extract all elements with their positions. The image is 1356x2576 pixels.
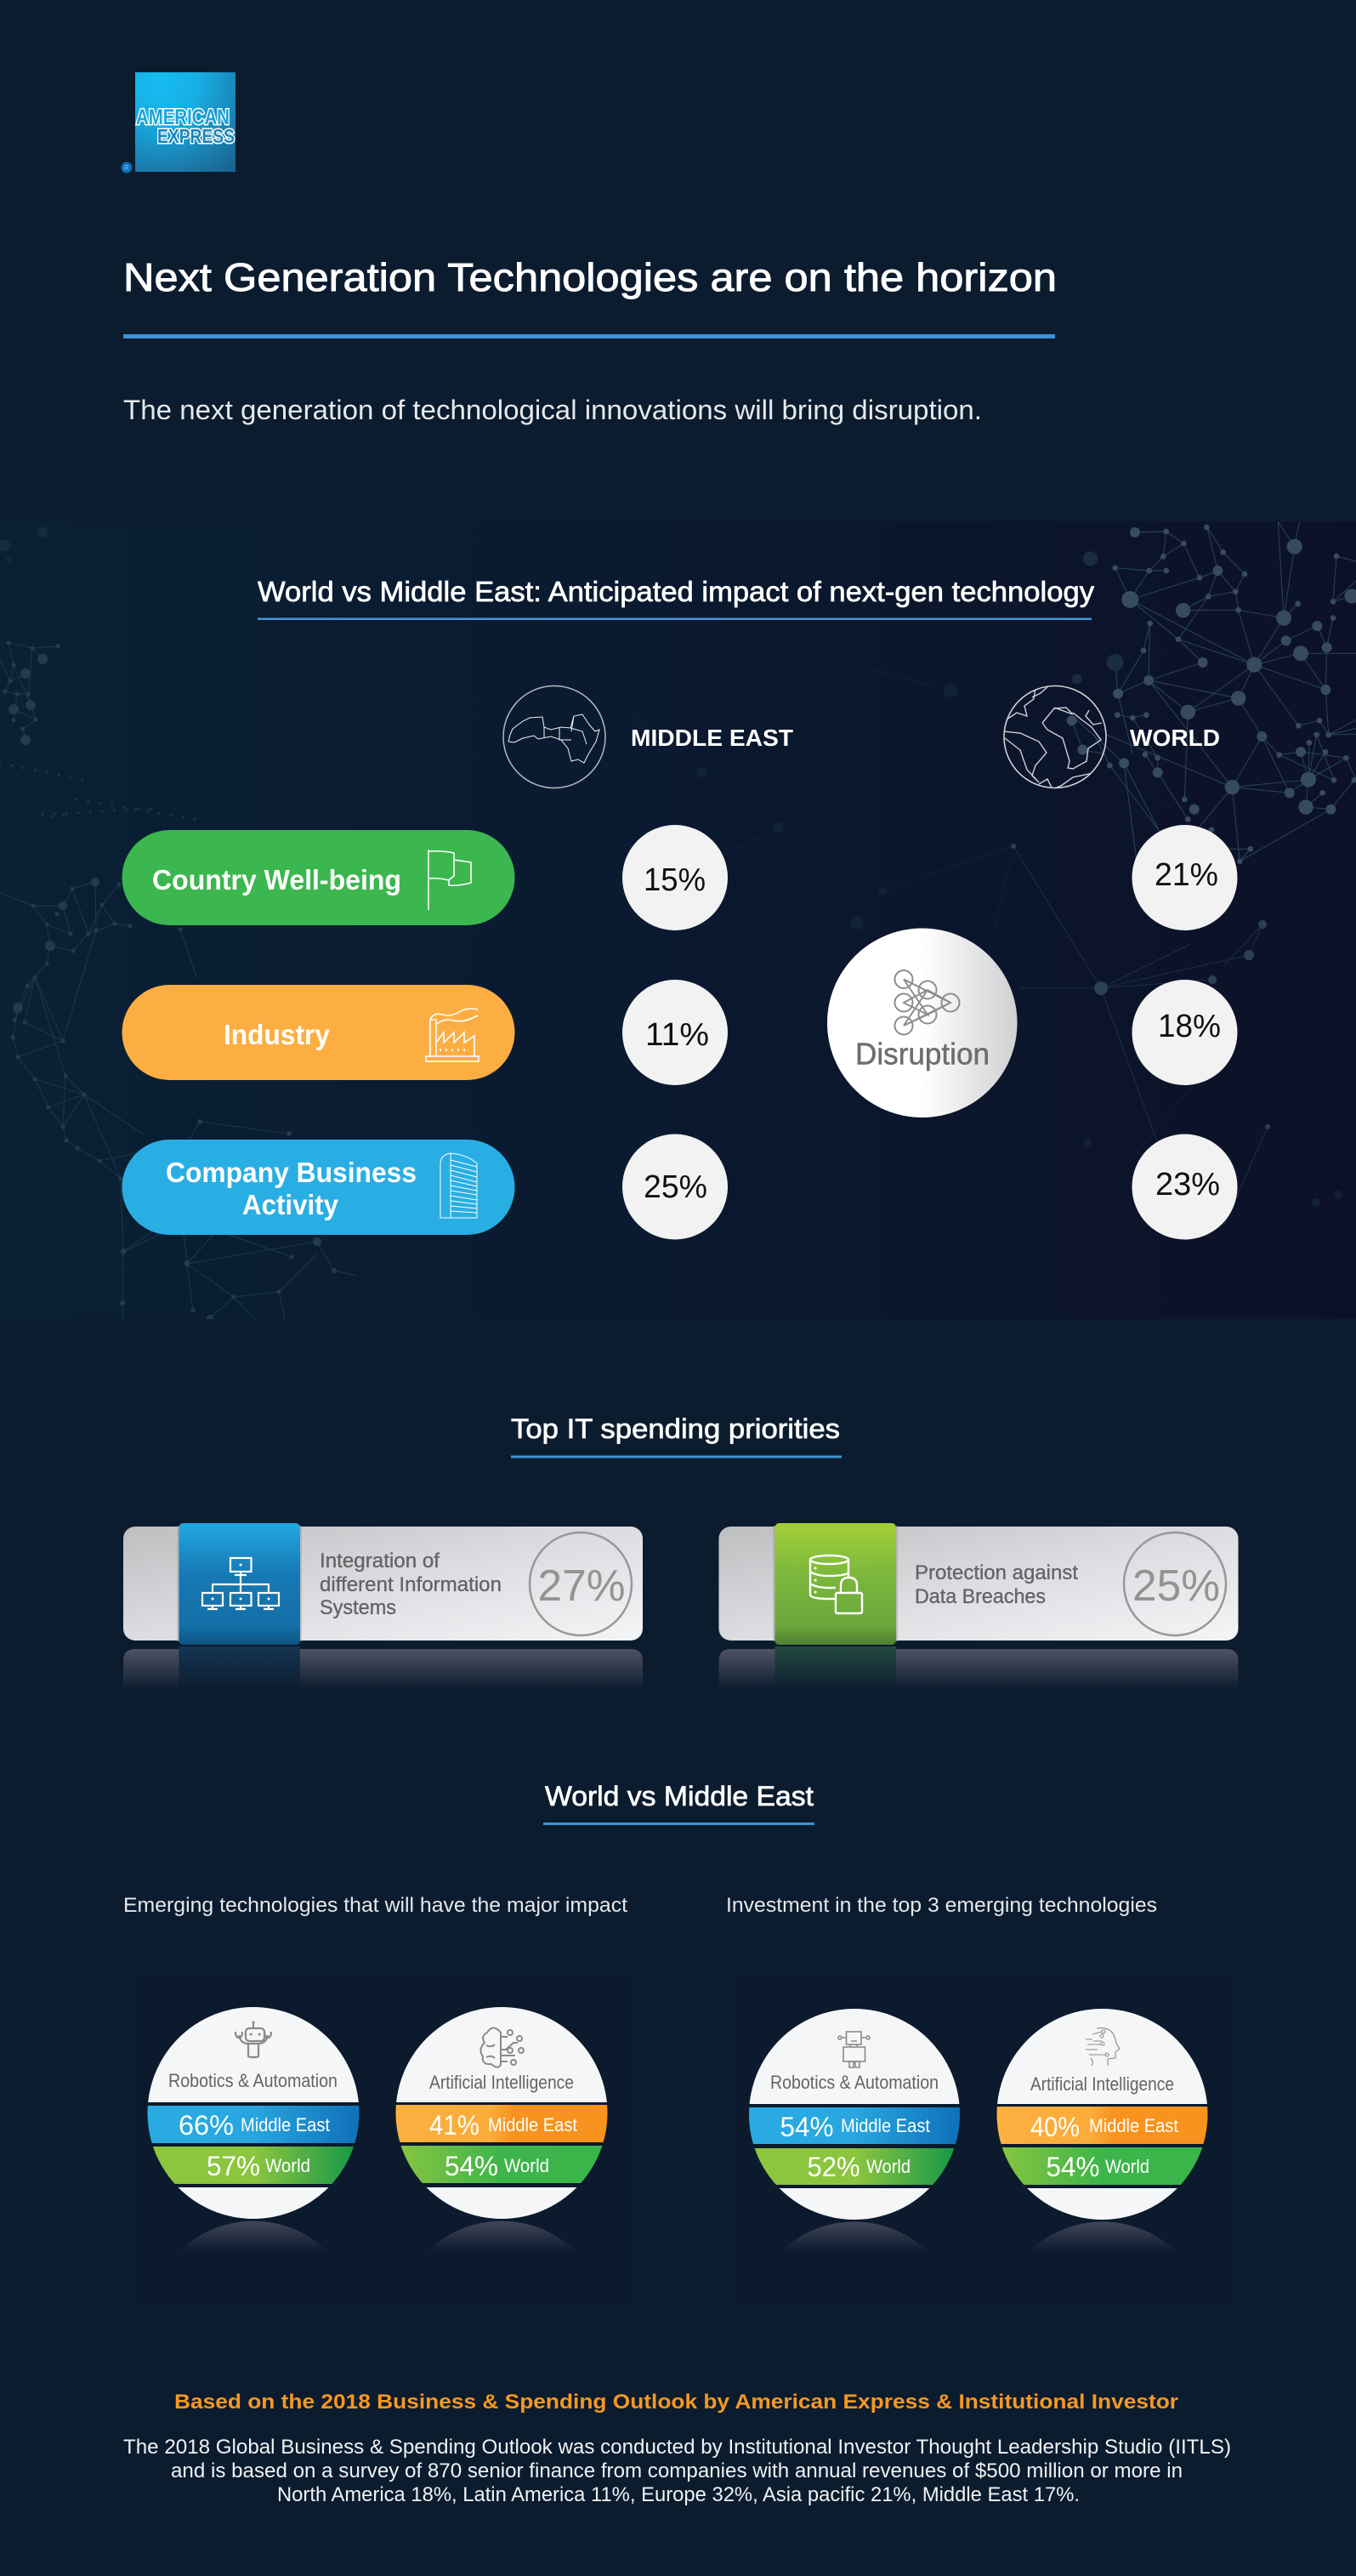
label: middle east: MIDDLE EAST [631, 725, 793, 751]
left network [0, 527, 357, 1322]
icon: brain circuit [480, 2027, 524, 2067]
row: industry [122, 985, 515, 1080]
card text [320, 1550, 502, 1619]
chart: robotics and automation, investment: Middle East [841, 2115, 930, 2136]
chart: robotics and automation, investment: 52% [808, 2152, 860, 2182]
icon: middle east globe [503, 685, 605, 788]
label: world: WORLD [1130, 725, 1220, 751]
chart: robotics and automation, investment [746, 2005, 963, 2253]
icon: database with padlock [810, 1555, 862, 1613]
reflection [427, 2221, 576, 2252]
value: middle east company business activity [622, 1134, 728, 1240]
value: middle east country well-being [622, 825, 728, 930]
card text: Protection against [915, 1561, 1078, 1584]
chart: artificial intelligence, impact: World [504, 2155, 549, 2176]
chart: artificial intelligence, investment: 40% [1030, 2112, 1080, 2142]
network map background [0, 521, 1356, 1322]
value: world company business activity: 23% [1155, 1167, 1220, 1203]
chart: artificial intelligence, investment: World [1105, 2156, 1149, 2177]
mid and lower-right network [629, 663, 1342, 1225]
logo: American Express: R [124, 164, 129, 172]
icon: neural network [894, 970, 959, 1034]
value: middle east country well-being: 15% [644, 862, 706, 898]
panel: anticipated impact of next-gen technology [0, 521, 1356, 1322]
card percentage: 25% [1132, 1561, 1220, 1611]
panel backdrop: investment [738, 1973, 1234, 2306]
chart: robotics and automation, impact [145, 2003, 362, 2252]
chart: artificial intelligence, impact [393, 2003, 610, 2252]
reflection [780, 2221, 929, 2253]
chart: robotics and automation, investment: World [866, 2156, 911, 2177]
reflection [719, 1646, 1238, 1690]
row: industry: Industry [224, 1019, 331, 1050]
icon: world globe [1003, 685, 1106, 789]
value: middle east company business activity: 25% [644, 1169, 707, 1205]
row: country well-being [122, 830, 515, 925]
card: protection against data breaches [719, 1523, 1238, 1690]
card percentage [530, 1533, 632, 1635]
chart: artificial intelligence, impact: 41% [429, 2110, 479, 2141]
row: company business activity [122, 1140, 515, 1235]
value: world company business activity [1132, 1134, 1238, 1240]
value: middle east industry [622, 980, 728, 1085]
disruption circle [827, 929, 1017, 1117]
value: world industry: 18% [1158, 1009, 1221, 1044]
subheading: investment: Investment in the top 3 emerging technologies [726, 1894, 1157, 1917]
subheading: emerging technologies: Emerging technologies that will have the major impact [123, 1894, 627, 1917]
card: integration of different information systems [123, 1523, 643, 1690]
card percentage [1124, 1533, 1226, 1635]
source text: and is based on a survey of 870 senior finance from companies with annual revenues of $500 million or more in [171, 2459, 1183, 2482]
source text: North America 18%, Latin America 11%, Europe 32%, Asia pacific 21%, Middle East 17%. [277, 2483, 1080, 2506]
chart: robotics and automation, impact: Robotics & Automation [168, 2070, 338, 2091]
card text: Integration of [320, 1550, 440, 1572]
row: company business activity: Activity [242, 1189, 339, 1220]
icon: office tower [440, 1153, 477, 1218]
row: country well-being: Country Well-being [152, 864, 401, 896]
logo: American Express [121, 72, 235, 173]
section heading: world vs middle east: World vs Middle East [545, 1781, 814, 1811]
icon: flag [428, 850, 471, 910]
chart: robotics and automation, impact: 66% [179, 2110, 234, 2141]
logo: American Express: EXPRESS [157, 125, 235, 147]
icon: robot [235, 2022, 271, 2057]
source text [123, 2436, 1231, 2506]
chart: robotics and automation, investment: 54% [780, 2112, 833, 2142]
value: world country well-being [1132, 825, 1238, 930]
disruption circle: Disruption [855, 1036, 990, 1072]
card text [915, 1561, 1078, 1608]
chart: artificial intelligence, impact: 54% [445, 2151, 498, 2181]
row: company business activity: Company Business [166, 1157, 417, 1188]
chart: robotics and automation, impact: World [265, 2155, 310, 2176]
chart: robotics and automation, investment: Robotics & Automation [770, 2072, 939, 2093]
card percentage: 27% [537, 1561, 626, 1611]
logo: American Express: AMERICAN [136, 105, 230, 129]
subtitle: The next generation of technological innovations will bring disruption. [123, 395, 982, 425]
reflection [1028, 2221, 1177, 2253]
value: middle east industry: 11% [645, 1017, 709, 1053]
source text: The 2018 Global Business & Spending Outlook was conducted by Institutional Investor Thought Leadership Studio (IITLS) [123, 2436, 1231, 2459]
title: Next Generation Technologies are on the horizon [123, 255, 1057, 299]
chart: robotics and automation, impact: Middle East [241, 2114, 330, 2135]
value: world country well-being: 21% [1155, 857, 1218, 893]
chart: robotics and automation, impact: 57% [207, 2151, 260, 2181]
icon: box robot [838, 2032, 870, 2067]
chart: artificial intelligence, investment: 54% [1046, 2152, 1100, 2182]
panel backdrop: emerging technologies [132, 1973, 633, 2306]
section heading: world vs middle east [543, 1781, 814, 1825]
section heading: top IT spending priorities [511, 1413, 842, 1458]
chart: artificial intelligence, impact: Artificial Intelligence [429, 2072, 574, 2093]
section heading: anticipated impact: World vs Middle East: Anticipated impact of next-gen technology [258, 576, 1095, 607]
reflection [123, 1646, 643, 1690]
section heading: top IT spending priorities: Top IT spending priorities [511, 1413, 840, 1444]
source heading: Based on the 2018 Business & Spending Outlook by American Express & Institutional Investor [174, 2391, 1178, 2414]
card text: Data Breaches [915, 1585, 1046, 1608]
title [123, 255, 1057, 338]
reflection [179, 2221, 328, 2252]
chart: artificial intelligence, impact: Middle East [488, 2114, 577, 2135]
chart: artificial intelligence, investment [993, 2005, 1211, 2253]
icon: connected computers [202, 1558, 279, 1609]
value: world industry [1132, 980, 1238, 1085]
card text: different Information [320, 1573, 502, 1596]
icon: digital head [1086, 2028, 1120, 2066]
chart: artificial intelligence, investment: Artificial Intelligence [1030, 2073, 1174, 2095]
card text: Systems [320, 1596, 396, 1619]
chart: artificial intelligence, investment: Middle East [1089, 2115, 1178, 2136]
icon: factory [426, 1009, 479, 1061]
